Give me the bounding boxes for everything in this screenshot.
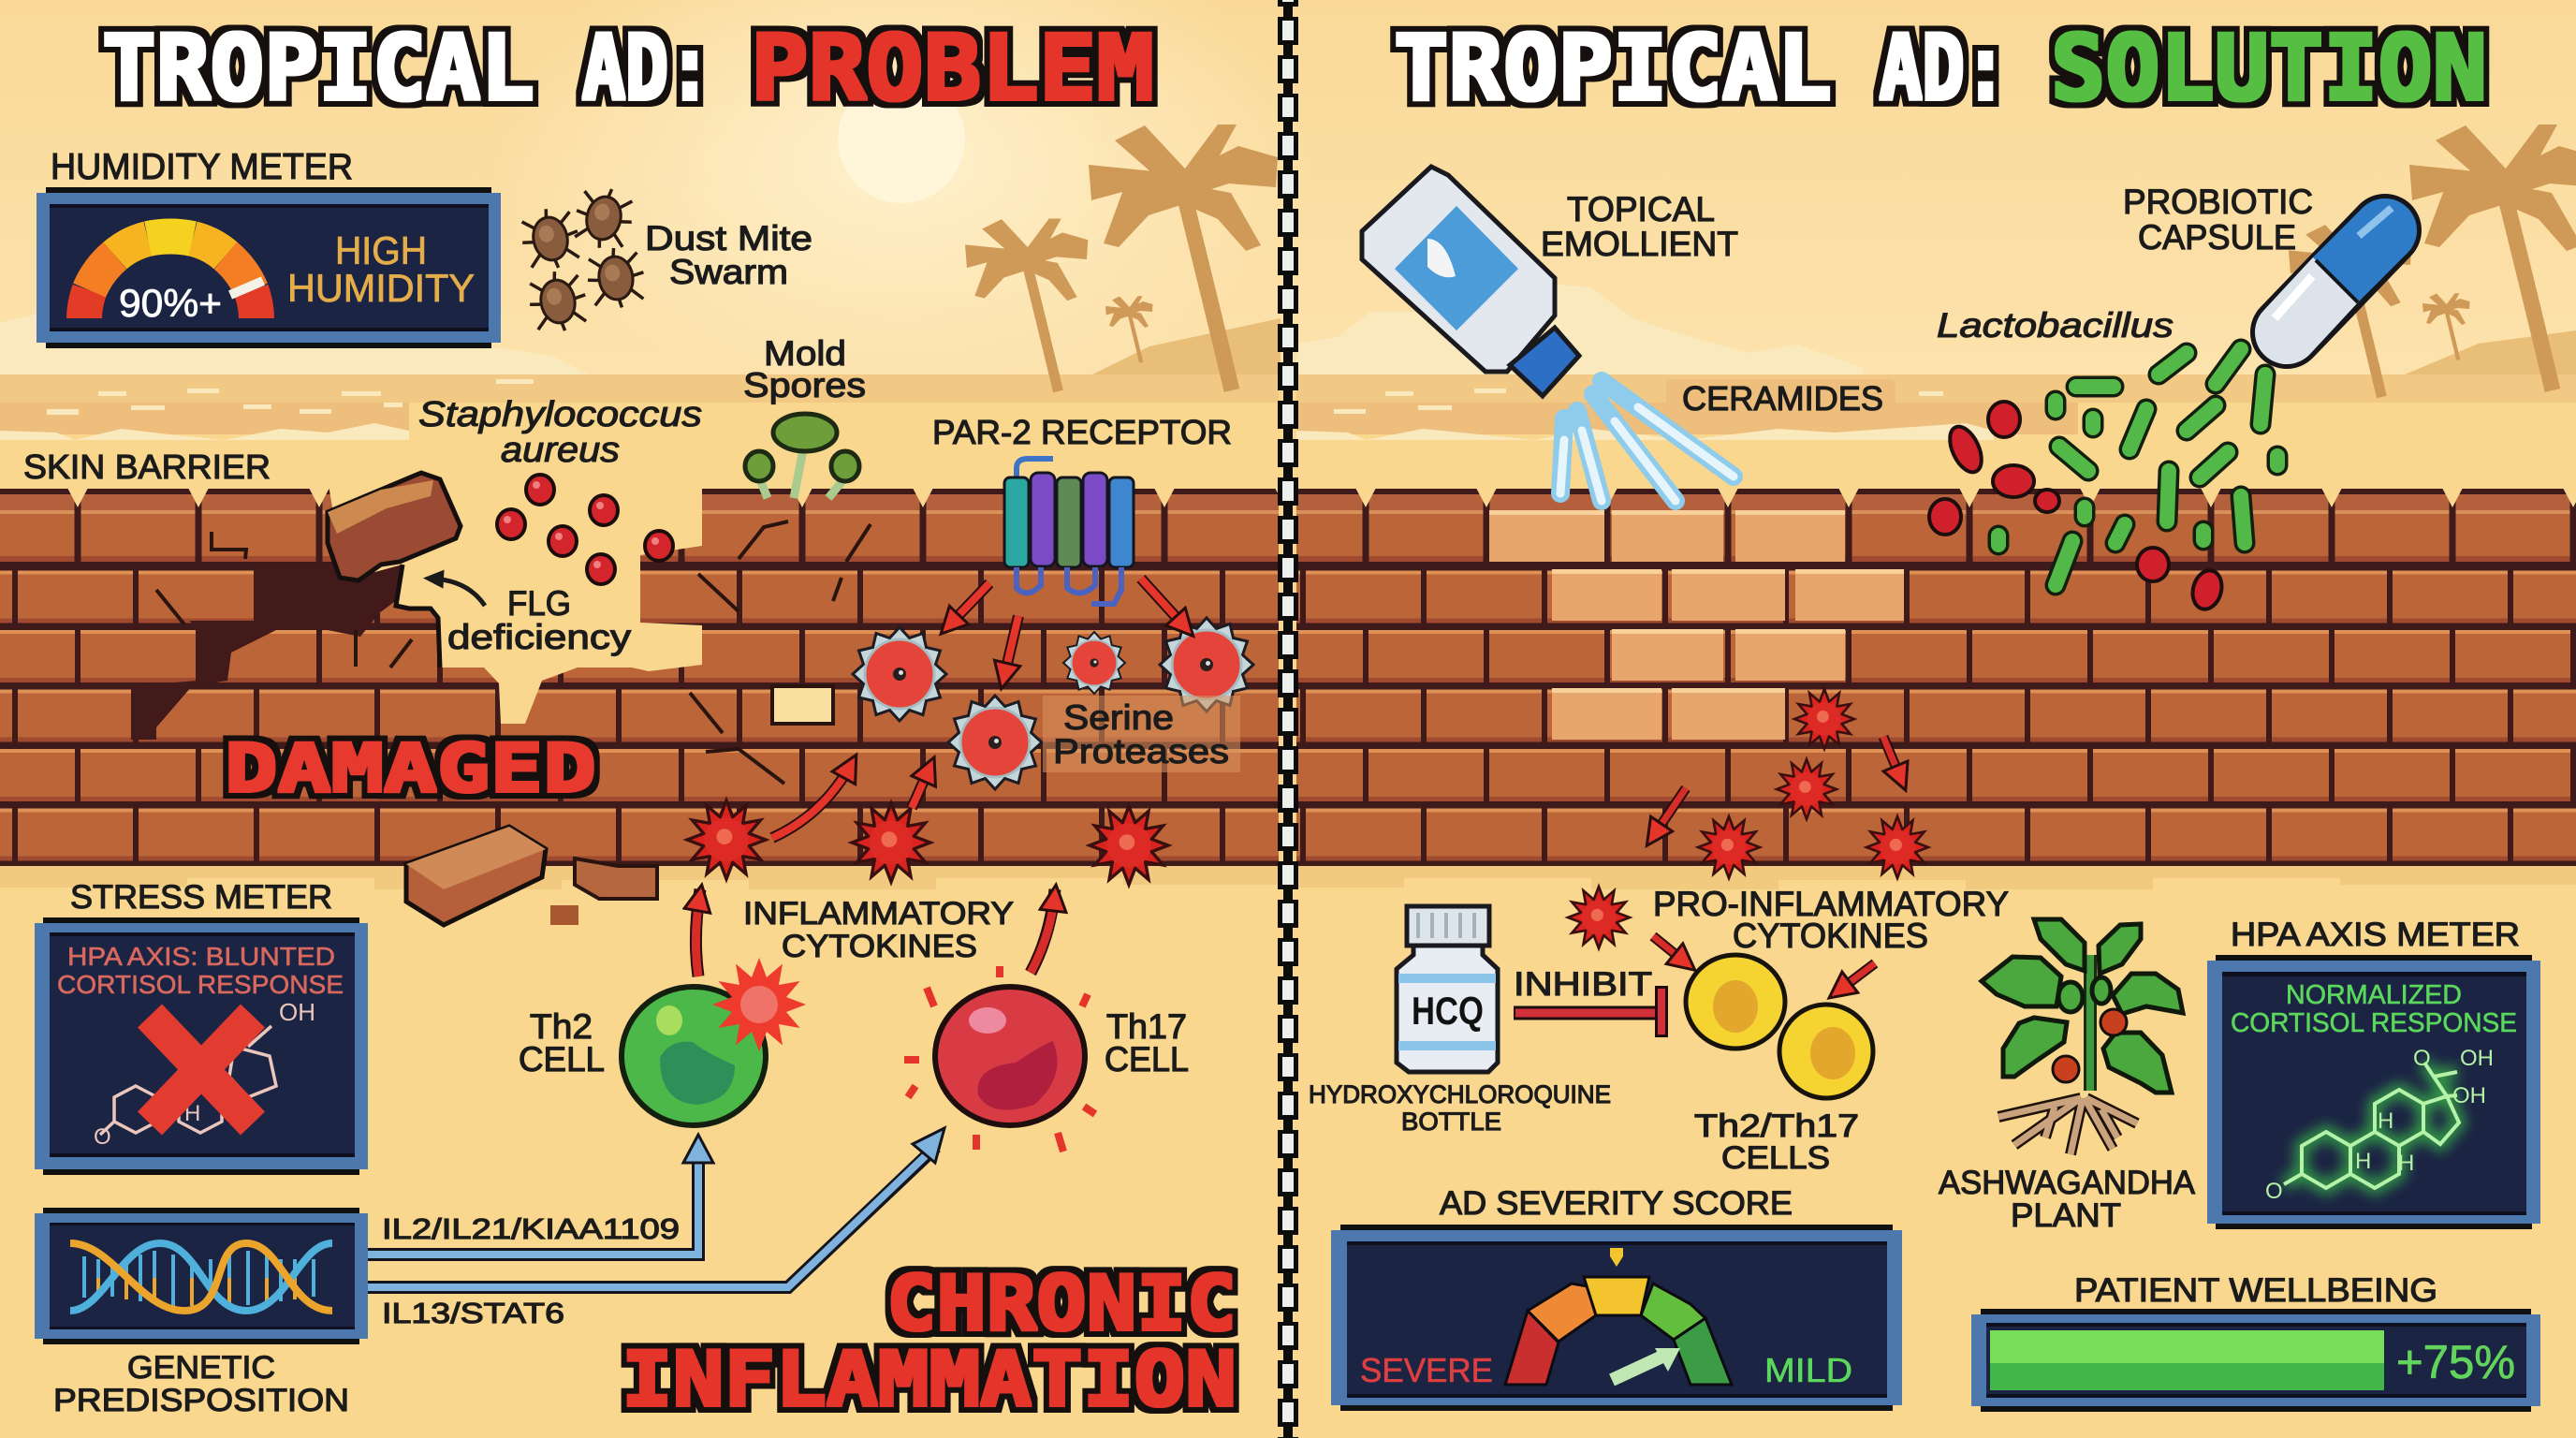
label: pro-inflammatory cytokines: PRO-INFLAMMATORY — [1653, 885, 2009, 923]
status text: HIGH — [335, 228, 427, 272]
label: ashwagandha plant: PLANT — [2011, 1197, 2121, 1234]
heading: stress meter: STRESS METER — [70, 879, 332, 916]
label: ashwagandha plant: ASHWAGANDHA — [1939, 1165, 2196, 1201]
label: dust mite swarm: Dust Mite — [645, 219, 812, 257]
arrows: receptor to proteases — [947, 579, 1187, 680]
icon: burst on th2 cell — [712, 958, 806, 1051]
gene labels — [382, 1212, 680, 1329]
label: serine proteases: Proteases — [1053, 732, 1229, 770]
title: problem: TROPICAL — [102, 16, 534, 121]
icon: red pathogens being displaced — [1929, 402, 2226, 612]
label: serine proteases: Serine — [1063, 698, 1174, 737]
normalized text: NORMALIZED — [2286, 980, 2462, 1010]
icon: probiotic capsule — [2275, 198, 2417, 332]
icon: ashwagandha plant — [1982, 919, 2183, 1154]
label: genetic predisposition: PREDISPOSITION — [53, 1383, 349, 1418]
icon: par-2 receptor — [1004, 459, 1134, 604]
label: probiotic capsule: CAPSULE — [2138, 218, 2296, 257]
title: problem — [102, 16, 1154, 121]
panel: humidity meter — [37, 187, 501, 348]
arrow: flg to hole — [432, 579, 485, 606]
label: topical emollient: EMOLLIENT — [1541, 225, 1738, 263]
icon: staph bacteria — [497, 475, 673, 584]
panel: stress meter: H — [184, 1101, 200, 1126]
label: staphylococcus aureus: aureus — [501, 431, 620, 470]
label: th17 cell: CELL — [1105, 1040, 1189, 1078]
panel: hpa axis meter — [2207, 955, 2540, 1229]
label: hydroxychloroquine bottle — [1309, 1080, 1611, 1136]
status text — [287, 228, 475, 310]
molecule labels: O — [2265, 1179, 2283, 1204]
label: inflammatory cytokines — [743, 896, 1014, 964]
label: topical emollient — [1541, 190, 1738, 263]
label: probiotic capsule — [2123, 183, 2313, 257]
stress text — [57, 942, 344, 999]
icon: th17 cell — [935, 987, 1085, 1125]
gauge: humidity arc — [84, 236, 256, 318]
arrows: cytokines to proteases — [772, 763, 930, 838]
label: dust mite swarm — [645, 219, 812, 291]
title: problem: PROBLEM — [751, 16, 1154, 121]
label: th2 cell: Th2 — [530, 1007, 593, 1046]
title: solution — [1394, 16, 2487, 121]
wellbeing bar — [1990, 1330, 2384, 1390]
label: hydroxychloroquine bottle: HYDROXYCHLOROQUINE — [1309, 1080, 1611, 1108]
molecule labels: H — [2378, 1108, 2393, 1134]
label: th2 cell: CELL — [519, 1040, 605, 1078]
label: damaged: DAMAGED — [225, 730, 596, 807]
label: par-2 receptor: PAR-2 RECEPTOR — [932, 413, 1232, 451]
dna helix — [70, 1243, 332, 1311]
label: ceramides: CERAMIDES — [1682, 379, 1883, 418]
label: th2 cell — [519, 1007, 605, 1078]
label: mold spores: Mold — [764, 334, 846, 373]
clouds — [0, 284, 1863, 374]
label: serine proteases — [1043, 696, 1240, 772]
callout: chronic inflammation: INFLAMMATION — [622, 1336, 1237, 1423]
normalized text: CORTISOL RESPONSE — [2231, 1008, 2517, 1038]
severe label: SEVERE — [1360, 1351, 1493, 1389]
label: th2/th17 cells: CELLS — [1721, 1140, 1830, 1176]
panel: stress meter: OH — [279, 998, 315, 1026]
mild label: MILD — [1764, 1351, 1852, 1389]
icon: hcq bottle — [1397, 906, 1498, 1072]
heading: ad severity score: AD SEVERITY SCORE — [1440, 1185, 1793, 1222]
molecule labels: OH — [2460, 1046, 2494, 1071]
label: genetic predisposition — [53, 1350, 349, 1418]
heading: patient wellbeing: PATIENT WELLBEING — [2074, 1272, 2437, 1309]
cortisol glow — [2284, 1063, 2459, 1188]
gauge needle — [230, 281, 263, 295]
normalized text — [2231, 980, 2517, 1038]
label: th17 cell: Th17 — [1106, 1007, 1187, 1046]
icon: hcq bottle: HCQ — [1412, 989, 1484, 1033]
label: th2/th17 cells — [1694, 1108, 1859, 1176]
label: genetic predisposition: GENETIC — [127, 1350, 275, 1386]
label: th17 cell — [1105, 1007, 1189, 1078]
icon: dust mite swarm — [517, 183, 648, 336]
title: solution: AD: — [1880, 16, 2007, 121]
label: ashwagandha plant — [1939, 1165, 2196, 1234]
molecule labels — [2265, 1046, 2494, 1204]
gauge value: 90%+ — [119, 281, 222, 325]
gene labels: IL13/STAT6 — [382, 1297, 564, 1329]
icon: inflammatory cytokines left — [687, 800, 1168, 885]
severity gauge — [1505, 1277, 1732, 1385]
label: flg deficiency — [447, 584, 632, 656]
molecule labels: H — [2355, 1149, 2371, 1174]
arrows: genes to cells — [365, 1128, 944, 1287]
red x — [150, 1016, 253, 1123]
label: probiotic capsule: PROBIOTIC — [2123, 183, 2313, 221]
wall gap and damage — [131, 473, 871, 925]
heading: humidity meter: HUMIDITY METER — [51, 147, 353, 187]
callout: chronic inflammation: CHRONIC — [886, 1260, 1237, 1347]
icon: topical emollient bottle — [1362, 167, 1579, 396]
label: inflammatory cytokines: CYTOKINES — [782, 929, 977, 964]
panel: stress meter: O — [94, 1124, 111, 1150]
arrows: cells to cytokines — [695, 889, 1055, 976]
label: topical emollient: TOPICAL — [1567, 190, 1715, 228]
icon: ceramide spray — [1560, 381, 1734, 501]
sparks around th17 cell — [904, 966, 1095, 1152]
severity needle — [1612, 1356, 1664, 1380]
palms and dunes: right — [2289, 125, 2576, 397]
label: pro-inflammatory cytokines — [1653, 885, 2009, 955]
label: th2/th17 cells: Th2/Th17 — [1694, 1108, 1859, 1144]
brick wall: right skin barrier — [1296, 489, 2576, 866]
brick wall: left skin barrier — [0, 489, 1279, 866]
icon: yellow th2/th17 cells — [1686, 955, 1873, 1098]
panel: patient wellbeing — [1971, 1309, 2540, 1412]
stress text: CORTISOL RESPONSE — [57, 970, 344, 999]
panel: ad severity score — [1331, 1225, 1902, 1411]
icon: serine protease blades — [853, 618, 1253, 789]
label: staphylococcus aureus: Staphylococcus — [418, 395, 702, 434]
center divider — [1278, 0, 1298, 1438]
label: mold spores: Spores — [743, 366, 866, 404]
label: inflammatory cytokines: INFLAMMATORY — [743, 896, 1014, 932]
panel: stress meter — [35, 917, 368, 1175]
title: problem: AD: — [582, 16, 711, 121]
icon: mold — [745, 414, 859, 498]
icon: pro-inflammatory cytokines right — [1568, 689, 1928, 948]
label: hydroxychloroquine bottle: BOTTLE — [1401, 1108, 1501, 1136]
title: solution: TROPICAL — [1394, 16, 1832, 121]
label: mold spores — [743, 334, 866, 404]
arrows: cytokine flow right — [1652, 737, 1902, 992]
heading: hpa axis meter: HPA AXIS METER — [2231, 917, 2520, 953]
label: dust mite swarm: Swarm — [669, 253, 788, 291]
panel: genetic predisposition — [35, 1208, 368, 1344]
label: flg deficiency: deficiency — [447, 618, 632, 656]
cortisol molecule — [2284, 1063, 2459, 1188]
molecule labels: H — [2398, 1151, 2414, 1176]
label: skin barrier: SKIN BARRIER — [23, 448, 271, 486]
label: flg deficiency: FLG — [507, 584, 571, 623]
sun — [838, 76, 965, 203]
title: solution: SOLUTION — [2051, 16, 2487, 121]
icon: lactobacillus rods — [1998, 349, 2277, 585]
blunted molecule — [100, 1026, 276, 1135]
icon: th2 cell — [622, 987, 766, 1125]
inhibit symbol: INHIBIT — [1514, 966, 1652, 1003]
gene labels: IL2/IL21/KIAA1109 — [382, 1212, 680, 1245]
label: pro-inflammatory cytokines: CYTOKINES — [1733, 917, 1928, 955]
palms and dunes: left — [965, 125, 1281, 391]
top marker — [1610, 1248, 1623, 1267]
callout: chronic inflammation — [622, 1260, 1237, 1423]
molecule labels: OH — [2452, 1083, 2486, 1108]
stress text: HPA AXIS: BLUNTED — [67, 942, 335, 971]
wellbeing value: +75% — [2396, 1336, 2515, 1388]
repaired light bricks — [1489, 510, 1904, 740]
status text: HUMIDITY — [287, 266, 475, 310]
molecule labels: O — [2413, 1046, 2431, 1071]
label: lactobacillus: Lactobacillus — [1937, 306, 2174, 345]
label: staphylococcus aureus — [418, 395, 702, 470]
